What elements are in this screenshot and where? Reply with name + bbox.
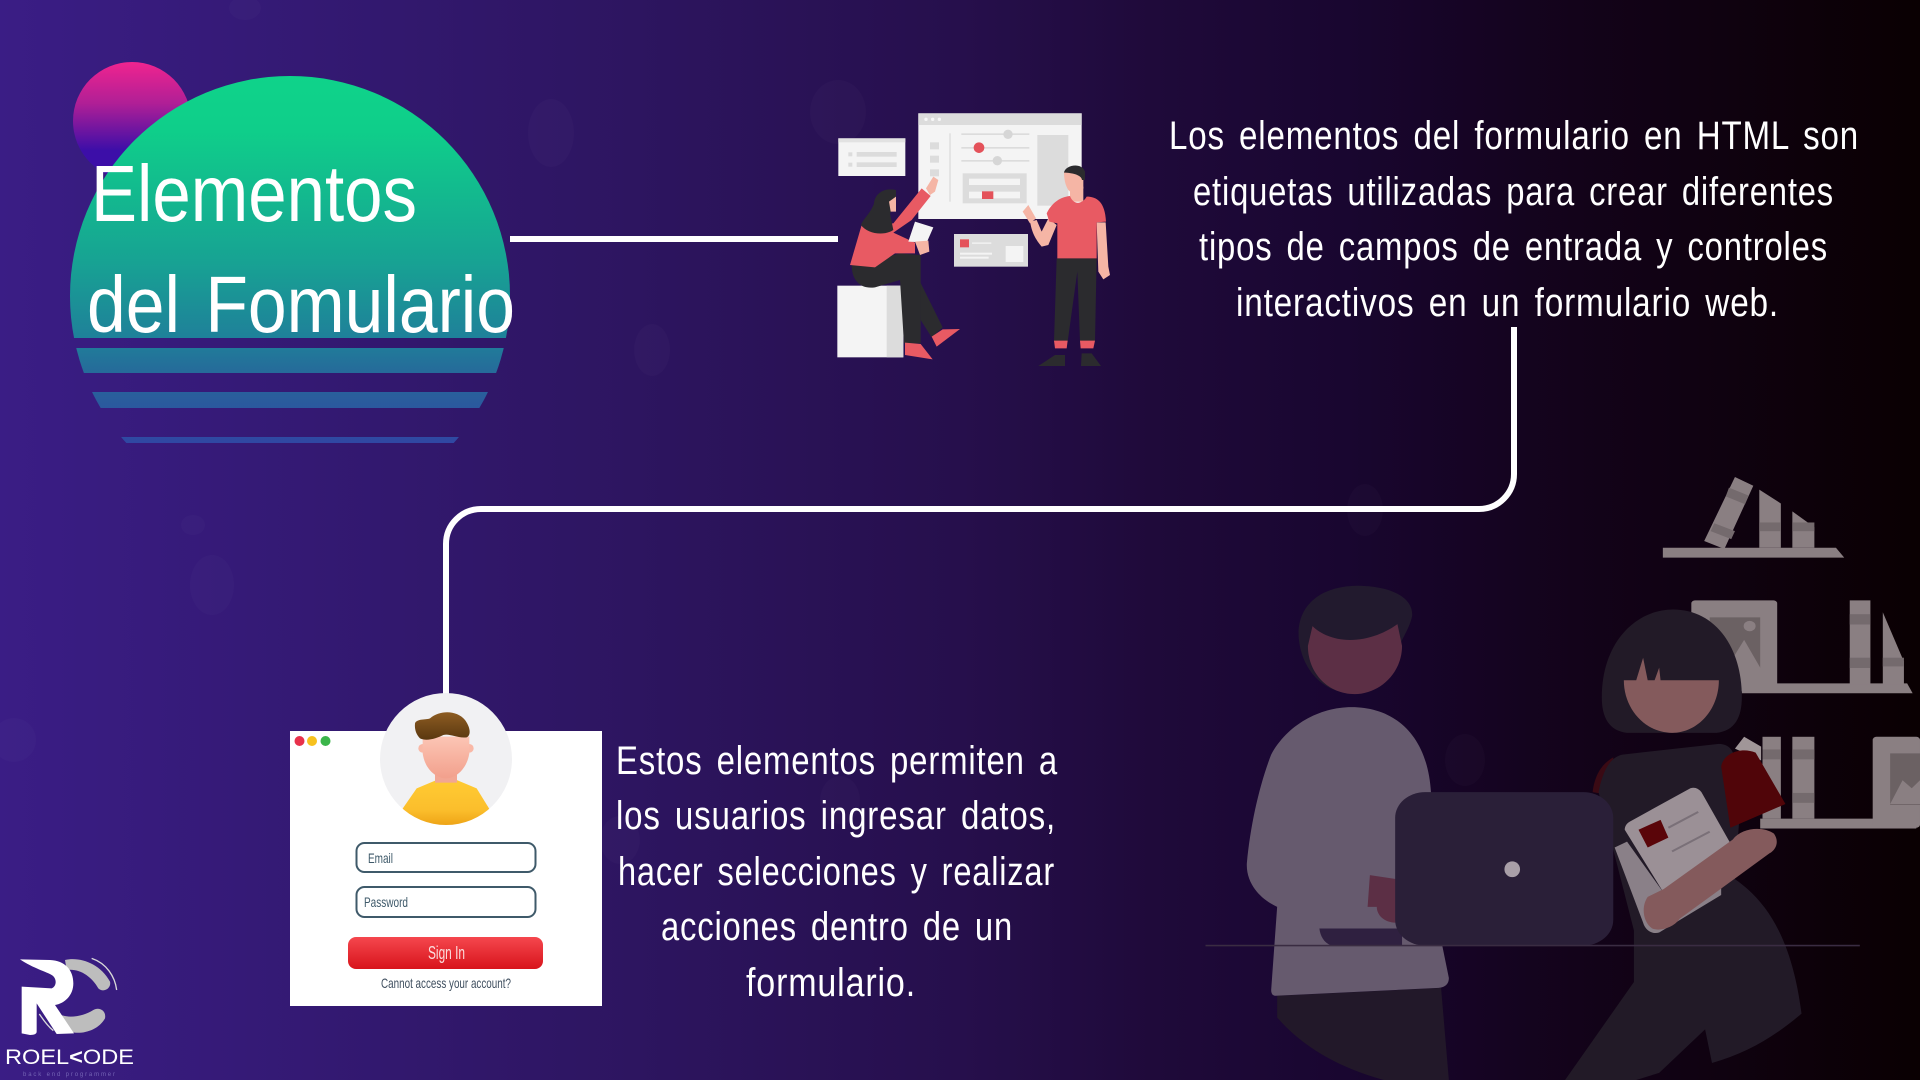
woman sitting on a box: [837, 177, 960, 359]
description paragraph bottom: formulario.: [746, 961, 916, 1005]
description paragraph top: interactivos en un formulario web.: [1236, 281, 1779, 325]
account link: Cannot access your account?: [381, 975, 511, 991]
description paragraph bottom: acciones dentro de un: [661, 905, 1013, 949]
description paragraph top: [1169, 114, 1859, 325]
description paragraph bottom: los usuarios ingresar datos,: [616, 794, 1056, 838]
description paragraph bottom: hacer selecciones y realizar: [618, 850, 1055, 894]
window dots: [294, 736, 330, 746]
connector: description to login form: [446, 327, 1514, 700]
background blobs: [0, 0, 1485, 864]
logo: [5, 958, 134, 1078]
small card left: [838, 138, 905, 176]
sign in button: Sign In: [428, 943, 465, 963]
title: [87, 149, 515, 349]
description paragraph bottom: Estos elementos permiten a: [616, 739, 1058, 783]
password input: [356, 887, 536, 917]
sign in button: [348, 937, 543, 969]
man standing: [1023, 165, 1110, 366]
description paragraph bottom: [616, 739, 1058, 1005]
small card bottom: [954, 234, 1028, 267]
man figure: [1247, 586, 1449, 1080]
main browser window: [918, 113, 1082, 219]
logo mark: [20, 958, 117, 1035]
user avatar: [380, 693, 512, 830]
password input: Password: [364, 894, 408, 910]
connector: title to illustration: [510, 236, 838, 242]
title: del Fomulario: [87, 260, 515, 349]
woman figure: [1565, 609, 1802, 1080]
form card: [290, 731, 602, 1006]
decorative pink circle: [73, 62, 191, 180]
login form illustration: [290, 693, 602, 1006]
email input: [356, 843, 536, 872]
title: Elementos: [91, 149, 417, 238]
laptop: [1395, 792, 1613, 946]
bookshelves: [1663, 477, 1920, 829]
green striped sun: [70, 76, 510, 443]
logo wordmark: ROEL <ODE: [5, 1046, 134, 1069]
illustration: people designing a form: [837, 113, 1110, 366]
illustration: faded people with laptop and bookshelves: [1206, 477, 1920, 1080]
email input: Email: [368, 850, 393, 866]
desk line: [1206, 945, 1860, 946]
logo tagline: back end programmer: [23, 1072, 115, 1078]
